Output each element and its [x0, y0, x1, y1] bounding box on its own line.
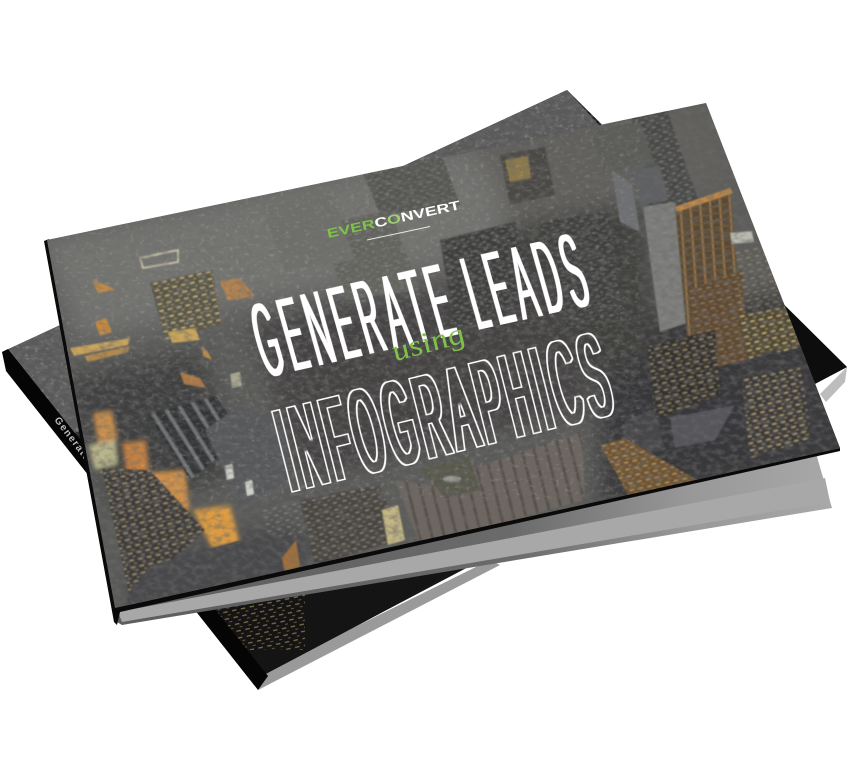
centre-right dark building [648, 330, 720, 420]
roof slabs [670, 405, 735, 448]
top book cover [40, 100, 848, 620]
photo grain dark [40, 100, 848, 615]
title: generate leads: GENERATE LEADS [239, 210, 599, 400]
striped building [149, 395, 228, 479]
warm low buildings [300, 485, 388, 564]
orange streets [88, 410, 240, 548]
lower amber facade [690, 270, 748, 372]
page block light band [118, 478, 830, 622]
dome top [420, 458, 480, 498]
back book spine text: Generate Leads using Infographics [52, 415, 185, 585]
upper-left orange patches [92, 280, 115, 293]
back book [0, 90, 847, 690]
mid-left roofs [204, 414, 286, 496]
lower-left dark roof [128, 536, 296, 605]
logo underline [367, 226, 430, 240]
bottom orange sliver [282, 540, 300, 572]
amber base glow [600, 438, 700, 498]
mauve skyscraper [395, 432, 585, 545]
back book cover image [0, 90, 847, 678]
glass tower [612, 170, 640, 232]
subtitle: using: using [385, 318, 470, 367]
top book page block [113, 440, 832, 625]
logo wordmark: EVER CONVERT [325, 197, 462, 241]
rooftop white sign [730, 231, 754, 244]
right lit building [739, 306, 800, 358]
central buildings [440, 222, 535, 330]
cover base photograph [47, 103, 840, 608]
page block side [113, 440, 832, 625]
back book right page edge [820, 367, 847, 402]
back book pages [256, 560, 500, 690]
book mockup illustration [2, 90, 847, 690]
soft light and shadow regions [40, 100, 848, 620]
upper skyline [630, 105, 700, 210]
back book cover [2, 90, 847, 678]
pale grey tower [643, 202, 690, 332]
back book spine [2, 349, 268, 690]
photo grain light [40, 100, 640, 500]
fine photo detail [70, 105, 840, 612]
left dark lit block [102, 468, 205, 598]
dark right building [740, 350, 840, 470]
title: infographics outline: INFOGRAPHICS [264, 308, 622, 517]
upper-left gold block [150, 270, 222, 340]
cover photograph scene [40, 100, 848, 620]
top book spine [44, 239, 840, 625]
amber lit tower [674, 194, 738, 337]
